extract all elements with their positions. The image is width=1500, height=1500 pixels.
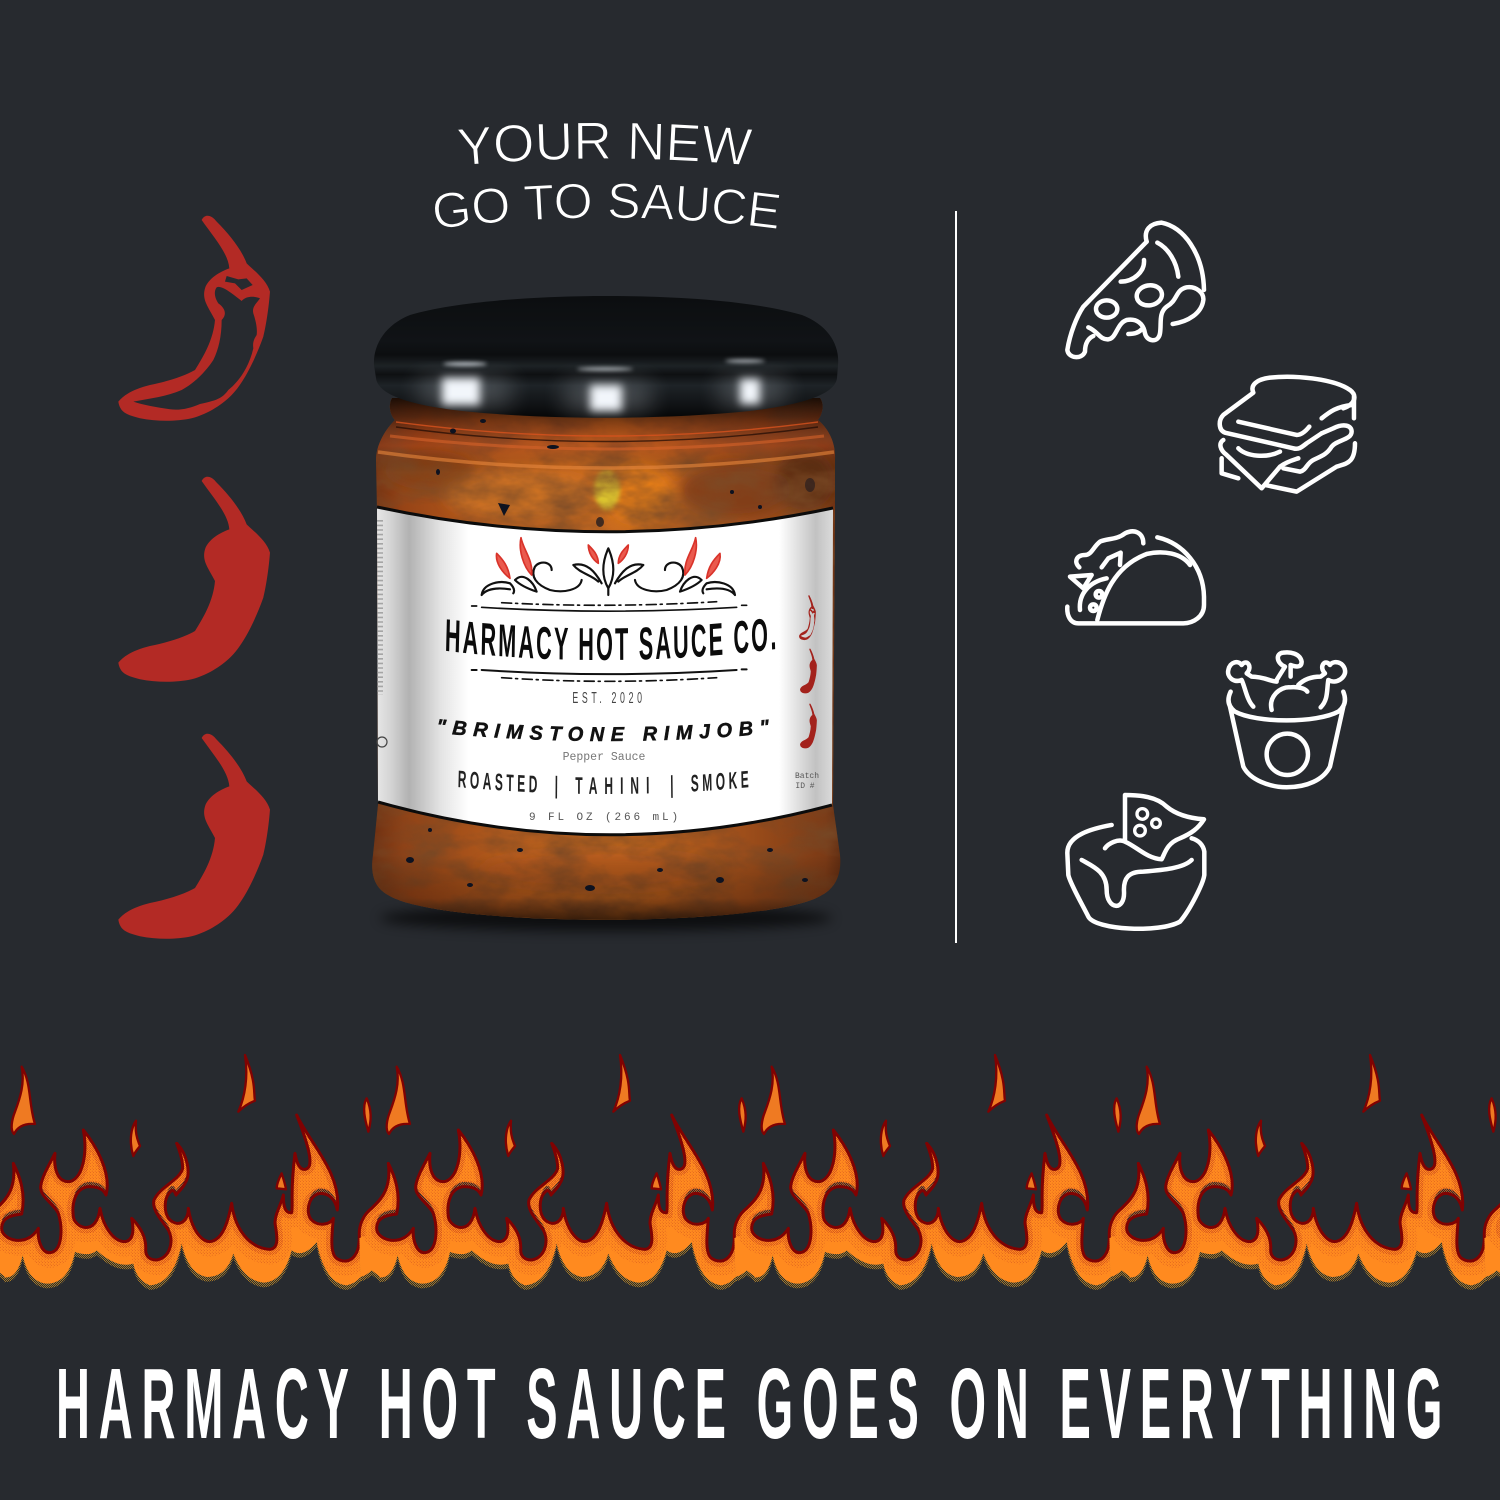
flavor notes: ROASTED | TAHINI | SMOKE	[458, 770, 748, 798]
heat scale: three chili peppers	[118, 216, 270, 939]
batch id: ID #	[795, 782, 815, 791]
icon: sandwich	[1220, 377, 1355, 492]
jar shadow	[380, 905, 832, 931]
right half flourish	[615, 538, 735, 595]
product type: Pepper Sauce	[563, 751, 645, 764]
established date: EST. 2020	[572, 688, 646, 707]
brand name: HARMACY HOT SAUCE CO.	[446, 618, 776, 660]
ingredient microtext	[377, 520, 383, 695]
label ornament	[472, 538, 747, 681]
icon: filled chili pepper bottom	[118, 734, 270, 939]
center petal	[603, 548, 613, 595]
dark pepper specks	[406, 419, 815, 891]
neck threads	[378, 422, 834, 468]
flame border	[0, 1055, 1500, 1290]
heading: your new go to sauce	[435, 123, 780, 228]
recycle mark	[377, 737, 387, 747]
divider	[955, 211, 957, 943]
icon: fried chicken bucket	[1228, 652, 1345, 787]
hot sauce jar	[372, 296, 840, 935]
batch id: Batch	[795, 772, 819, 781]
jar lid	[370, 295, 842, 421]
heading: your new go to sauce: YOUR NEW	[458, 123, 752, 164]
icon: filled chili pepper middle	[118, 477, 270, 682]
heading: your new go to sauce: GO TO SAUCE	[435, 184, 780, 228]
icon: taco	[1067, 531, 1204, 623]
net volume: 9 FL OZ (266 mL)	[529, 812, 681, 824]
jar contents	[365, 395, 850, 935]
left half flourish	[482, 538, 602, 595]
tagline: HARMACY HOT SAUCE GOES ON EVERYTHING	[56, 1347, 1442, 1460]
label	[376, 506, 834, 836]
icon: pizza slice	[1067, 223, 1204, 357]
rules above and below the brand	[472, 602, 747, 681]
food icons	[1067, 223, 1355, 929]
icon: outlined chili pepper	[118, 216, 270, 421]
icon: nacho and cheese bowl	[1067, 795, 1204, 929]
small heat chilies	[799, 595, 817, 748]
flavor name: "BRIMSTONE RIMJOB"	[438, 719, 769, 742]
